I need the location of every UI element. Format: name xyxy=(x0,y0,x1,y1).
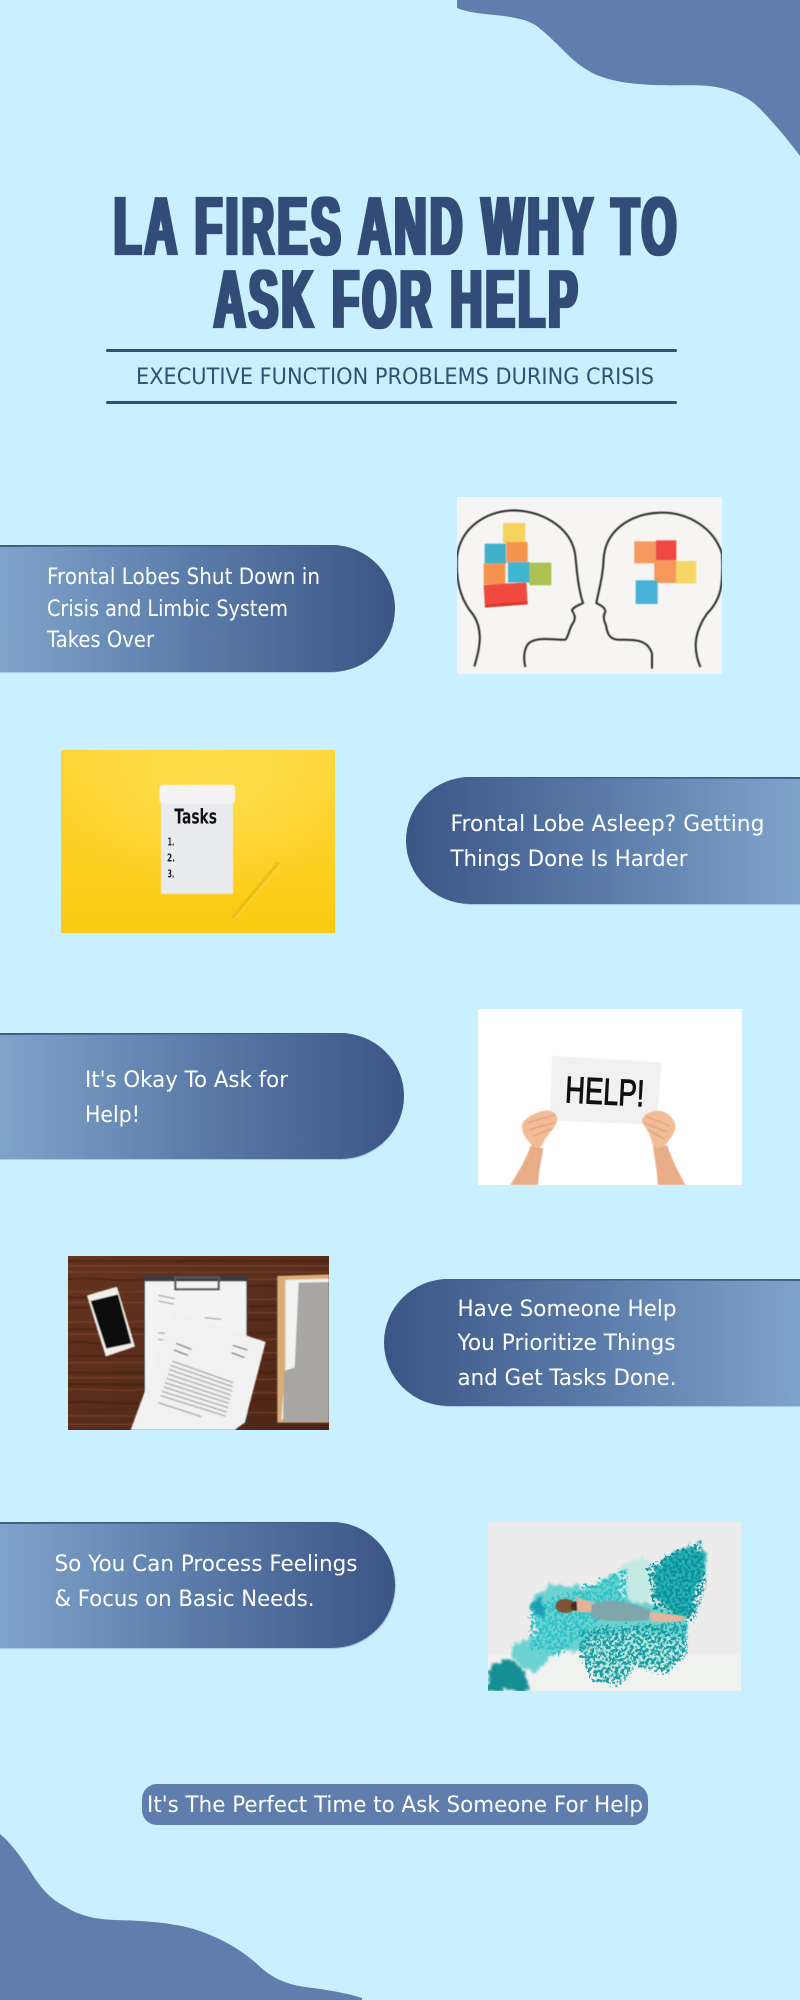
panel: okay to ask callout: Help! xyxy=(85,1103,140,1128)
panel: process feelings callout: So You Can Process Feelings xyxy=(54,1552,358,1577)
panel: frontal lobes callout: Frontal Lobes Shut Down in xyxy=(47,565,320,590)
panel: frontal lobes callout xyxy=(0,545,395,673)
photo: two heads with blocks xyxy=(457,497,722,674)
panel: have someone help callout: and Get Tasks Done. xyxy=(458,1366,676,1391)
panel: frontal lobe asleep callout: Things Done Is Harder xyxy=(450,847,688,872)
decorative blob: top right xyxy=(457,0,800,156)
photo: tasks notepad on yellow: 1. xyxy=(168,836,174,849)
title block xyxy=(106,180,680,404)
photo: tasks notepad on yellow: Tasks xyxy=(174,804,217,828)
photo: hands holding help sign: HELP! xyxy=(564,1068,646,1114)
photo: tasks notepad on yellow: 2. xyxy=(167,851,175,864)
photo: tasks notepad on yellow: 3. xyxy=(168,868,174,881)
decorative blob: bottom left xyxy=(0,1834,362,2000)
photo: hands holding help sign xyxy=(478,1009,742,1185)
panel: frontal lobes callout: Crisis and Limbic System xyxy=(47,597,288,622)
panel: have someone help callout xyxy=(384,1279,800,1407)
photo: clipboard and phone on desk xyxy=(68,1256,329,1430)
panel: frontal lobe asleep callout xyxy=(406,777,800,905)
panel: process feelings callout: & Focus on Basic Needs. xyxy=(54,1587,314,1612)
panel: okay to ask callout xyxy=(0,1033,404,1160)
panel: have someone help callout: You Prioritize Things xyxy=(457,1331,676,1356)
subtitle: EXECUTIVE FUNCTION PROBLEMS DURING CRISIS xyxy=(136,365,654,390)
panel: have someone help callout: Have Someone Help xyxy=(458,1297,676,1322)
closing banner xyxy=(142,1784,648,1825)
panel: okay to ask callout: It's Okay To Ask for xyxy=(85,1068,289,1093)
photo: woman floating in teal ink xyxy=(488,1522,741,1691)
panel: process feelings callout xyxy=(0,1522,396,1649)
panel: frontal lobe asleep callout: Frontal Lobe Asleep? Getting xyxy=(450,812,764,837)
panel: frontal lobes callout: Takes Over xyxy=(46,628,155,653)
closing banner: It's The Perfect Time to Ask Someone For Help xyxy=(147,1793,643,1818)
heading xyxy=(114,180,680,346)
photo: tasks notepad on yellow xyxy=(61,750,335,933)
